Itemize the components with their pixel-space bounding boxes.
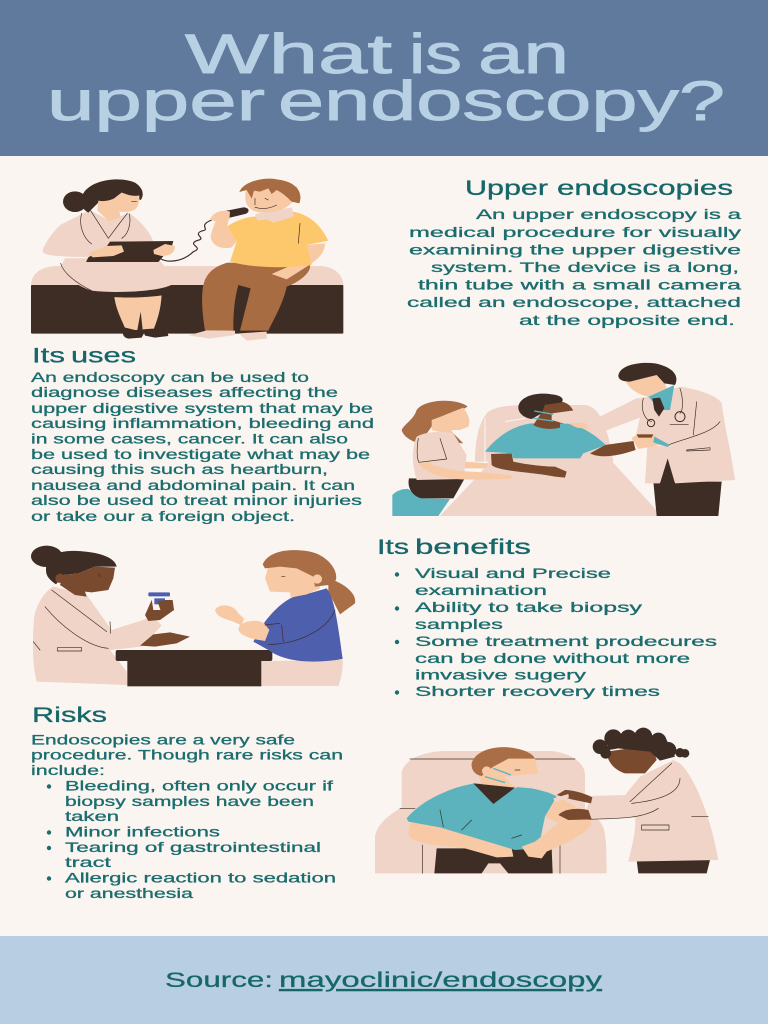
title: an (478, 22, 569, 85)
panel: its uses (31, 344, 374, 524)
title: endoscopy? (278, 69, 725, 132)
list: benefits: Shorter recovery times (415, 683, 660, 699)
list: benefits: Ability to take biopsy (415, 599, 642, 615)
heading: its benefits: Its (377, 536, 409, 559)
text block: uses: causing this such as heartburn, (31, 461, 328, 477)
text block: uses: be used to investigate what may be (31, 446, 370, 462)
text block: definition: called an endoscope, attached (407, 294, 741, 310)
armchair (375, 751, 607, 873)
patient (407, 747, 592, 873)
curly hair (593, 728, 689, 761)
list: risks: Tearing of gastrointestinal (65, 839, 321, 855)
list: benefits: samples (415, 616, 503, 632)
footer: source (0, 936, 768, 1024)
list: benefits: imvasive sugery (415, 666, 586, 682)
list: risks: or anesthesia (65, 885, 193, 901)
list: risks: Bleeding, often only occur if (65, 778, 333, 794)
text block: risks intro (31, 732, 343, 778)
list: benefits: can be done without more (415, 650, 690, 666)
list: benefits: Some treatment prodecures (415, 633, 717, 649)
panel: upper endoscopies text (407, 177, 741, 328)
visitor (392, 401, 512, 516)
list: risks: taken (65, 808, 119, 824)
text block: definition: at the opposite end. (519, 312, 735, 328)
nurse (553, 728, 718, 873)
doctor (43, 179, 175, 339)
bench (31, 266, 343, 334)
title (47, 22, 725, 132)
title: upper (47, 69, 265, 132)
text block: risks intro: include: (31, 762, 105, 778)
list: risks: tract (65, 854, 111, 870)
text block: uses (31, 369, 374, 524)
text block: definition (407, 206, 741, 328)
heading: upper endoscopies: endoscopies (557, 177, 733, 200)
hospital bed (440, 405, 662, 516)
text block: uses: diagnose diseases affecting the (31, 384, 338, 400)
heading: upper endoscopies: Upper (465, 177, 548, 200)
sample cup (148, 592, 170, 610)
heading: its uses: Its (32, 344, 65, 368)
heading: its uses (32, 344, 136, 368)
heading: upper endoscopies (465, 177, 733, 200)
illustration: nurse treating seated masked patient (375, 728, 718, 873)
list: benefits (395, 565, 717, 699)
footer: source: Source: (165, 969, 273, 992)
illustration: doctor with patient in bed and visitor (392, 363, 735, 516)
text block: risks intro: procedure. Though rare risks can (31, 746, 343, 762)
header banner (0, 0, 768, 156)
text block: definition: system. The device is a long, (431, 259, 739, 275)
text block: uses: causing inflammation, bleeding and (31, 415, 374, 431)
text block: risks intro: Endoscopies are a very safe (31, 732, 295, 748)
list: risks: biopsy samples have been (65, 793, 314, 809)
text block: uses: or take our a foreign object. (31, 508, 295, 524)
heading: its benefits: benefits (415, 536, 531, 559)
heading: its benefits (377, 536, 531, 559)
list: benefits: examination (415, 582, 547, 598)
text block: definition: medical procedure for visually (409, 224, 741, 240)
patient (215, 550, 355, 662)
panel: risks (31, 704, 343, 901)
text block: uses: nausea and abdominal pain. It can (31, 477, 355, 493)
doctor (568, 363, 735, 516)
list: benefits: Visual and Precise (415, 565, 611, 581)
illustration: doctor and patient with endoscope on bench (31, 179, 343, 341)
patient (188, 179, 328, 341)
heading: its uses: uses (71, 344, 136, 368)
heading: risks: Risks (32, 704, 107, 727)
text block: definition: examining the upper digestive (409, 242, 741, 258)
source link: mayoclinic/endoscopy (279, 969, 603, 992)
doctor (31, 546, 190, 685)
list: risks: Allergic reaction to sedation (65, 870, 336, 886)
list: risks (47, 778, 336, 901)
text block: uses: upper digestive system that may be (31, 400, 373, 416)
panel: its benefits (377, 536, 717, 699)
text block: uses: also be used to treat minor injuries (31, 492, 362, 508)
endoscope cord (158, 220, 212, 261)
illustration: doctor holding sample cup with patient at table (31, 546, 355, 686)
text block: uses: An endoscopy can be used to (31, 369, 309, 385)
text block: definition: thin tube with a small camera (418, 276, 741, 292)
list: risks: Minor infections (65, 824, 220, 840)
title: What (185, 22, 393, 85)
table (116, 650, 343, 686)
title: is (409, 22, 462, 85)
text block: definition: An upper endoscopy is a (476, 206, 741, 222)
text block: uses: in some cases, cancer. It can also (31, 430, 348, 446)
patient in bed (485, 394, 636, 478)
